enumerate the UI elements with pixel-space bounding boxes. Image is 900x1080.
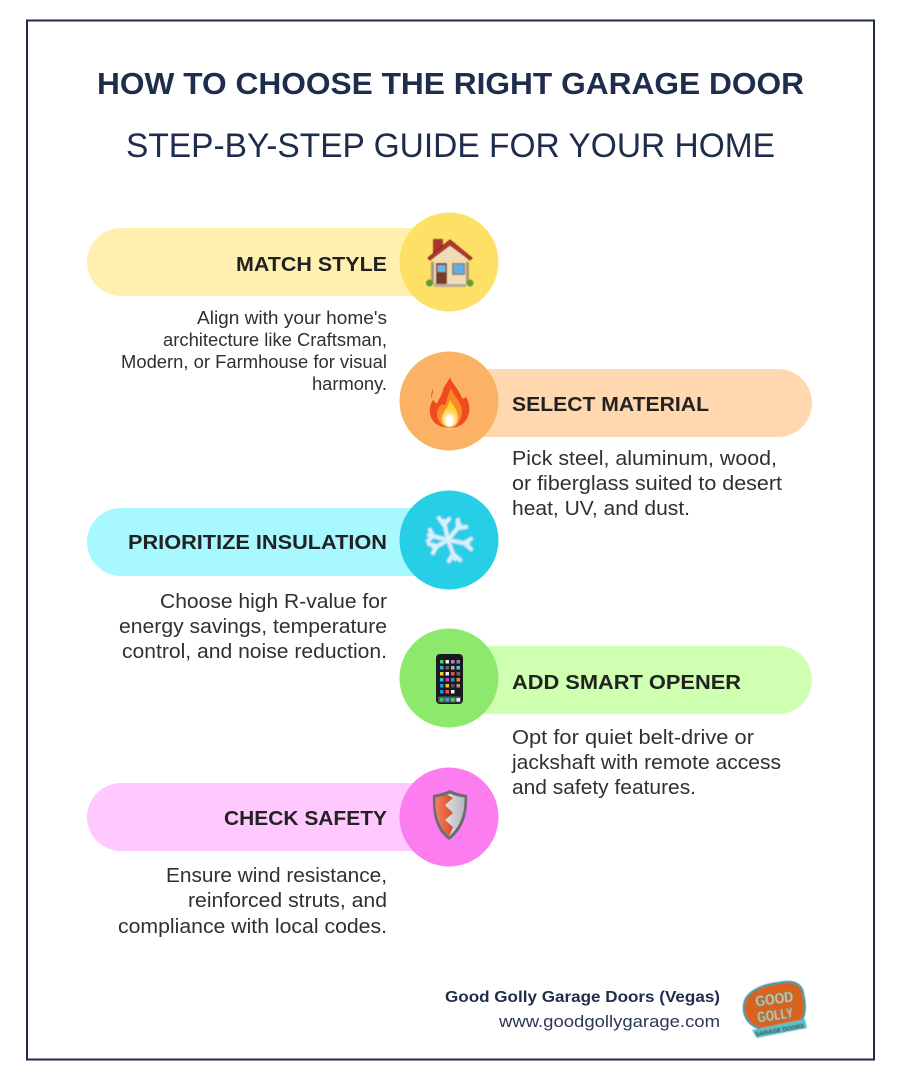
pill: add smart opener [449,646,812,714]
panel: step 3 prioritize insulation [87,490,498,663]
circle: add smart opener [400,628,498,728]
text: select material description: Pick steel, aluminum, wood, [512,448,777,470]
icon: house [426,239,474,287]
text: match style description: Align with your home's [197,308,387,328]
heading: prioritize insulation: PRIORITIZE INSULATION [128,531,387,554]
icon: shield [433,790,467,840]
footer: website: www.goodgollygarage.com [498,1012,720,1031]
text: add smart opener description: and safety features. [512,777,696,799]
heading: add smart opener: ADD SMART OPENER [512,671,741,694]
pill: select material [449,369,812,437]
text: match style description: Modern, or Farmhouse for visual [121,352,387,372]
text: prioritize insulation description: control, and noise reduction. [122,641,387,663]
pill: prioritize insulation [87,508,449,576]
panel: step 1 match style [87,212,499,394]
title: HOW TO CHOOSE THE RIGHT GARAGE DOOR [97,66,804,101]
circle: match style [400,212,498,312]
logo: Good Golly: GOLLY [756,1005,794,1026]
text: check safety description [118,865,387,938]
text: check safety description: reinforced struts, and [188,890,387,912]
text: match style description: architecture like Craftsman, [163,330,387,350]
circle: select material [400,352,498,450]
panel: step 2 select material [400,352,812,520]
circle: check safety [400,768,498,866]
icon: smartphone [436,654,463,704]
text: prioritize insulation description: energy savings, temperature [119,616,387,638]
panel: step 4 add smart opener [400,628,812,799]
text: select material description [512,448,782,520]
text: add smart opener description [511,727,781,799]
heading: select material: SELECT MATERIAL [512,393,709,416]
circle: prioritize insulation [400,490,498,590]
heading: match style: MATCH STYLE [236,253,387,276]
subtitle: STEP-BY-STEP GUIDE FOR YOUR HOME [126,127,775,165]
pill: match style [87,228,449,296]
pill: check safety [87,783,449,851]
logo: Good Golly: GARAGE DOORS [755,1024,805,1038]
text: check safety description: Ensure wind resistance, [166,865,387,887]
icon: snowflake [428,518,471,561]
icon: fire [430,377,469,428]
footer: company name: Good Golly Garage Doors (Vegas) [445,989,720,1006]
logo: Good Golly: GOOD [754,988,795,1011]
heading: check safety: CHECK SAFETY [224,807,387,830]
text: prioritize insulation description: Choose high R-value for [160,591,387,613]
text: add smart opener description: Opt for quiet belt-drive or [512,727,754,749]
text: add smart opener description: jackshaft with remote access [511,752,781,774]
text: match style description [121,308,387,394]
text: match style description: harmony. [312,374,387,394]
panel: step 5 check safety [87,768,498,938]
text: check safety description: compliance with local codes. [118,916,387,938]
text: select material description: heat, UV, and dust. [512,498,690,520]
text: prioritize insulation description [119,591,387,663]
text: select material description: or fiberglass suited to desert [512,473,782,495]
logo: Good Golly [744,982,807,1038]
